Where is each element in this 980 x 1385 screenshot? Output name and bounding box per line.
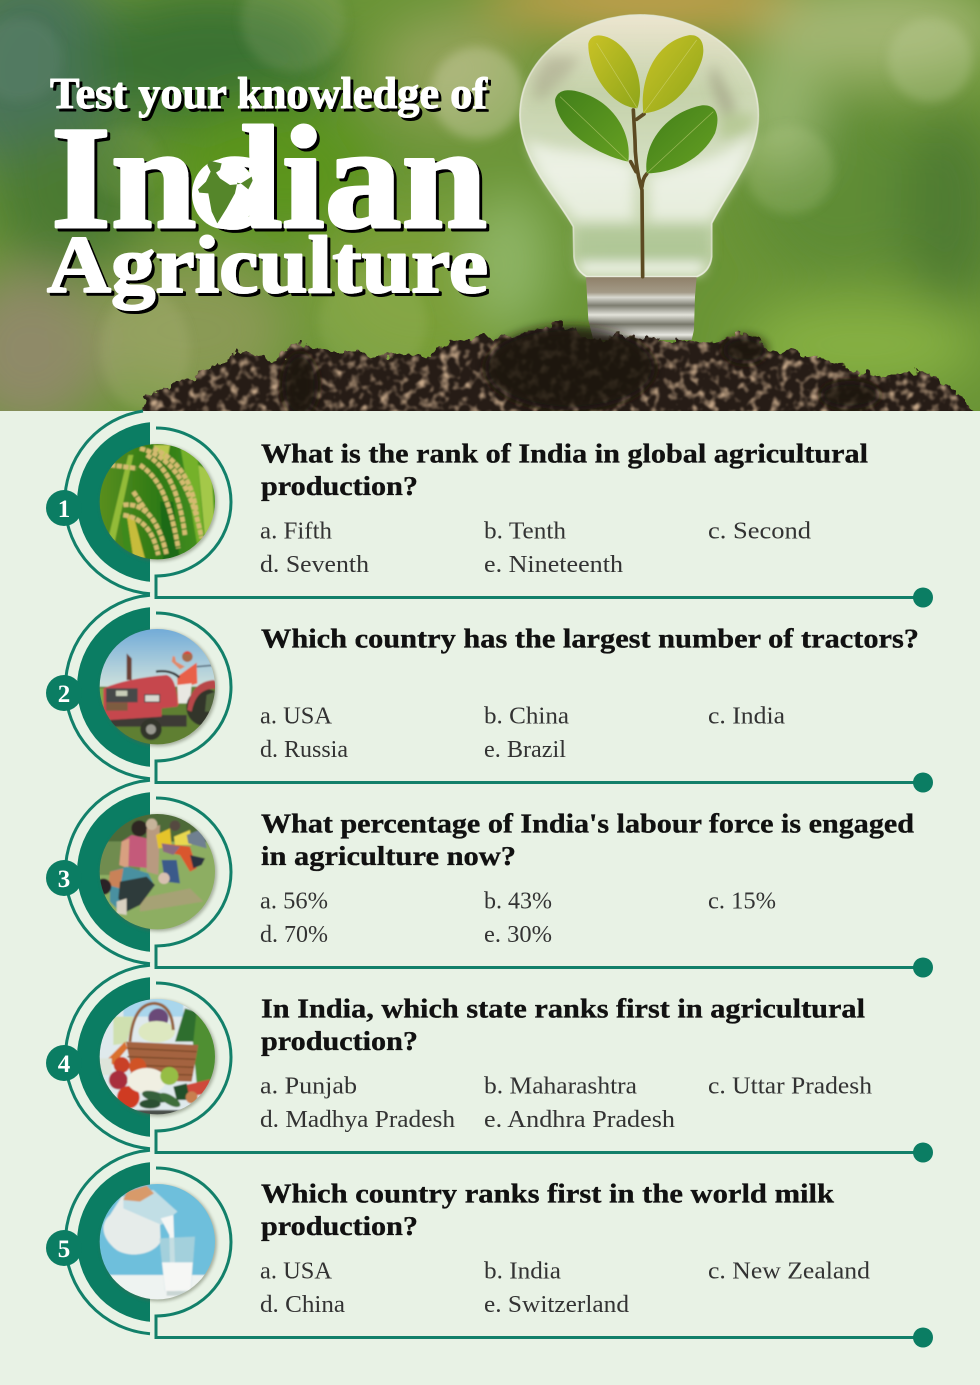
question 5 text xyxy=(261,1178,834,1241)
number badge 5: 5 xyxy=(58,1236,70,1263)
question 5 text: Which country ranks first in the world milk xyxy=(261,1178,834,1208)
question 3 options: d. 70% xyxy=(260,922,328,948)
question 1 options: a. Fifth xyxy=(260,518,332,544)
question 3 options: a. 56% xyxy=(260,888,328,914)
question 4 options: c. Uttar Pradesh xyxy=(708,1074,872,1100)
connector dot xyxy=(913,1328,933,1348)
title xyxy=(47,69,488,310)
number badge 5 xyxy=(46,1230,82,1266)
connector dot xyxy=(913,958,933,978)
title word: Indian: Indian xyxy=(51,96,487,259)
question 1 options: c. Second xyxy=(708,518,811,544)
seedling leaves xyxy=(555,35,717,173)
ring and connector xyxy=(65,411,923,598)
question 2 options: e. Brazil xyxy=(484,737,566,763)
question 4 options: a. Punjab xyxy=(260,1074,357,1100)
question 1 options: b. Tenth xyxy=(484,518,566,544)
number badge 2 xyxy=(46,675,82,711)
number badge 4 xyxy=(46,1045,82,1081)
question 4 options: d. Madhya Pradesh xyxy=(260,1107,455,1133)
number badge 1: 1 xyxy=(58,496,70,523)
ring and connector xyxy=(65,965,923,1152)
question 5 options: b. India xyxy=(484,1258,561,1284)
question 2 options: a. USA xyxy=(260,704,333,730)
number badge 2: 2 xyxy=(58,681,70,708)
bulb glass xyxy=(520,15,758,277)
question 1 text xyxy=(261,438,869,501)
question 4 text: production? xyxy=(261,1026,418,1056)
question 1 text: production? xyxy=(261,471,418,501)
question 3 text: What percentage of India's labour force is engaged xyxy=(261,808,914,838)
title line: Test your knowledge of: Test your knowledge of xyxy=(50,69,488,118)
question 5 options: e. Switzerland xyxy=(484,1292,629,1318)
question 1 panel xyxy=(46,411,933,608)
question 5 panel xyxy=(46,1150,933,1348)
connector dot xyxy=(913,1142,933,1162)
question 3 options: c. 15% xyxy=(708,888,776,914)
icon: map of India inside the letter d xyxy=(192,159,256,229)
soil mound xyxy=(142,319,974,411)
connector dot xyxy=(913,588,933,608)
question 3 options: b. 43% xyxy=(484,888,552,914)
question 5 options: a. USA xyxy=(260,1258,333,1284)
number badge 3: 3 xyxy=(58,866,70,893)
connector dot xyxy=(913,772,933,792)
question 2 panel xyxy=(46,595,933,792)
question 2 options: c. India xyxy=(708,704,785,730)
ring and connector xyxy=(65,780,923,968)
question 3 text: in agriculture now? xyxy=(261,841,516,871)
question 3 panel xyxy=(46,780,933,978)
question 4 options: b. Maharashtra xyxy=(484,1074,637,1100)
hero banner photo xyxy=(0,0,980,430)
question 1 options: d. Seventh xyxy=(260,552,369,578)
number badge 1 xyxy=(46,490,82,526)
question 2 text: Which country has the largest number of tractors? xyxy=(261,624,919,654)
photo: milk poured into a glass xyxy=(97,1182,220,1305)
question 3 options: e. 30% xyxy=(484,922,552,948)
question 4 text xyxy=(261,994,866,1056)
question 3 options xyxy=(260,888,776,948)
ring and connector xyxy=(65,1150,923,1338)
question 1 options xyxy=(260,518,811,578)
lamp screw base xyxy=(586,277,697,340)
photo: red tractor with farmer xyxy=(97,627,224,750)
question 2 options xyxy=(260,704,785,763)
question 4 panel xyxy=(46,965,933,1162)
question 5 text: production? xyxy=(261,1211,418,1241)
question 1 text: What is the rank of India in global agricultural xyxy=(261,438,869,468)
question 4 text: In India, which state ranks first in agricultural xyxy=(261,994,866,1024)
question 2 options: d. Russia xyxy=(260,737,348,763)
bulb reflections xyxy=(527,57,757,273)
question 3 text xyxy=(261,808,914,871)
question 4 options xyxy=(260,1074,872,1133)
title word: Agriculture: Agriculture xyxy=(47,219,488,310)
question 1 options: e. Nineteenth xyxy=(484,552,623,578)
question 5 options: c. New Zealand xyxy=(708,1258,870,1284)
number badge 3 xyxy=(46,860,82,896)
question 5 options xyxy=(260,1258,870,1318)
photo: basket of vegetables xyxy=(97,997,220,1120)
question 5 options: d. China xyxy=(260,1292,345,1318)
number badge 4: 4 xyxy=(58,1051,71,1078)
ring and connector xyxy=(65,595,923,782)
photo: rice plant xyxy=(97,442,220,565)
seedling stem xyxy=(631,110,647,277)
illustration: light bulb with seedling xyxy=(520,15,758,340)
question 4 options: e. Andhra Pradesh xyxy=(484,1107,675,1133)
question 2 options: b. China xyxy=(484,704,569,730)
photo: workers planting in a field xyxy=(95,812,220,935)
